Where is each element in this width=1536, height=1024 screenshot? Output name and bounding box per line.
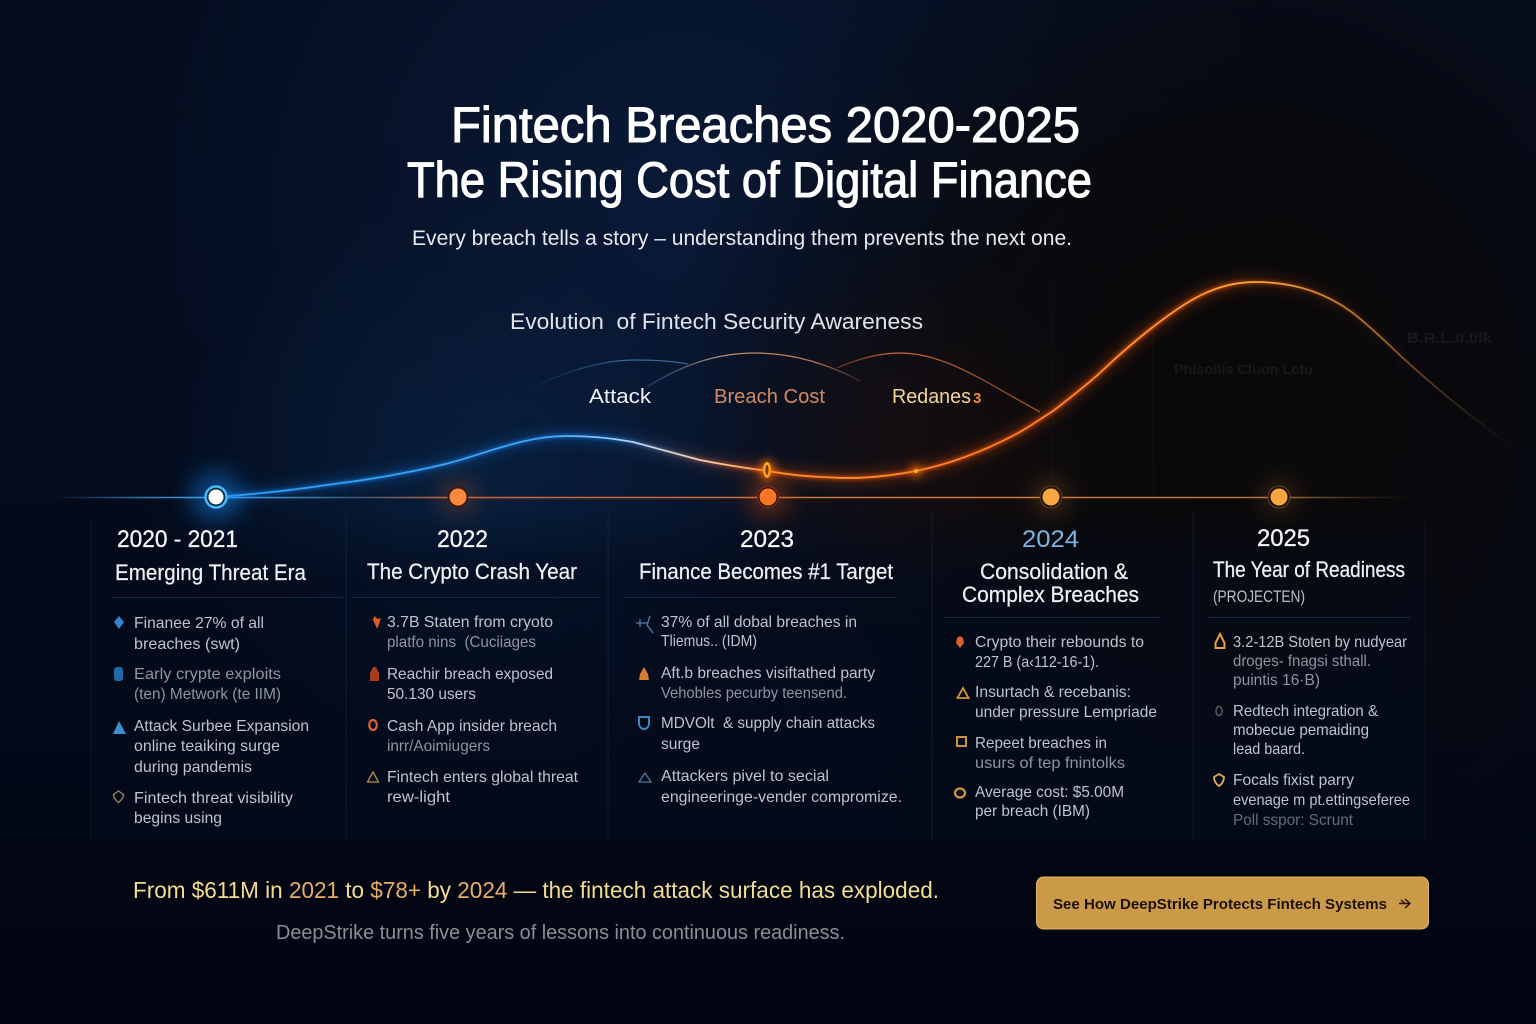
panel: 2022 The Crypto Crash Year: 3.7B Staten from cryoto xyxy=(387,614,553,631)
icon: shield blue xyxy=(639,717,649,729)
panel: 2025 The Year of Readiness: lead baard. xyxy=(1233,741,1305,758)
panel: 2022 The Crypto Crash Year: inrr/Aoimiugers xyxy=(387,738,490,755)
icon: amber flame xyxy=(1216,634,1224,648)
icon: coin xyxy=(955,788,965,798)
panel: 2024 Consolidation and Complex Breaches: 2024 xyxy=(1022,526,1079,553)
panel: 2020-2021 Emerging Threat Era: during pandemis xyxy=(134,759,252,776)
icon: warning amber xyxy=(958,688,968,698)
node: 2025 xyxy=(1264,482,1294,512)
panel: 2020-2021 Emerging Threat Era: online teaiking surge xyxy=(134,738,280,755)
legend labels: 3 xyxy=(973,390,981,407)
call-to-action button: See How DeepStrike Protects Fintech Systems xyxy=(1053,896,1387,913)
panel: 2022 The Crypto Crash Year: Fintech enters global threat xyxy=(387,769,579,786)
subtitle: Every breach tells a story – understanding them prevents the next one. xyxy=(412,227,1072,250)
panel: 2024 Consolidation and Complex Breaches: Consolidation & xyxy=(980,559,1128,584)
panel: 2020-2021 Emerging Threat Era: begins using xyxy=(134,810,222,827)
panel: 2023 Finance Becomes #1 Target: surge xyxy=(661,736,700,753)
faint ghost labels xyxy=(1174,330,1493,377)
panel: 2020-2021 Emerging Threat Era: (ten) Metwork (te IIM) xyxy=(134,686,281,703)
icon: diamond xyxy=(114,616,124,629)
closing statement: From $611M in 2021 to $78+ by 2024 — the fintech attack surface has exploded. xyxy=(133,877,939,903)
icon: database xyxy=(114,667,123,681)
panel: 2024 Consolidation and Complex Breaches: 227 B (a‹112-16-1). xyxy=(975,654,1099,671)
panel: 2020-2021 Emerging Threat Era: 2020 - 2021 xyxy=(117,526,238,553)
panel: 2025 The Year of Readiness: (PROJECTEN) xyxy=(1213,587,1305,606)
icon: network arrow xyxy=(636,616,653,633)
icon: ring xyxy=(369,720,377,730)
faint ghost labels: Phisoilis Cluon Lctu xyxy=(1174,361,1313,377)
panel: 2024 Consolidation and Complex Breaches: Insurtach & recebanis: xyxy=(975,684,1131,701)
panel: 2025 The Year of Readiness: Redtech integration & xyxy=(1233,703,1378,720)
icon: orange drop xyxy=(956,636,964,648)
call-to-action button xyxy=(1036,877,1428,929)
panel: 2022 The Crypto Crash Year: Cash App insider breach xyxy=(387,718,557,735)
icon: grey ring xyxy=(1216,706,1222,716)
panel: 2020-2021 Emerging Threat Era: Finanee 27% of all xyxy=(134,615,264,632)
icon: arrow xyxy=(1399,899,1410,908)
icon: triangle outline xyxy=(639,773,651,782)
panel: 2025 The Year of Readiness: mobecue pemaiding xyxy=(1233,722,1369,739)
panel: 2023 Finance Becomes #1 Target: Aft.b breaches visiftathed party xyxy=(661,665,875,682)
legend labels: Breach Cost xyxy=(714,386,825,408)
panel: 2020-2021 Emerging Threat Era: breaches (swt) xyxy=(134,636,240,653)
panel: 2024 Consolidation and Complex Breaches: Crypto their rebounds to xyxy=(975,634,1144,651)
panel: 2025 The Year of Readiness: evenage m pt.ettingseferee xyxy=(1233,792,1410,809)
panel: 2023 Finance Becomes #1 Target: MDVOlt & supply chain attacks xyxy=(661,715,875,732)
panel: 2025 The Year of Readiness: puintis 16·B) xyxy=(1233,672,1320,689)
panel: 2022 The Crypto Crash Year: rew-light xyxy=(387,789,451,806)
legend labels xyxy=(589,386,981,408)
panel: 2023 Finance Becomes #1 Target: Vehobles pecurby teensend. xyxy=(661,685,847,702)
title: The Rising Cost of Digital Finance xyxy=(407,152,1092,208)
panel: 2025 The Year of Readiness: 2025 xyxy=(1257,525,1310,552)
timeline axis xyxy=(55,496,1410,498)
panel: 2023 Finance Becomes #1 Target: 2023 xyxy=(740,526,794,553)
panel: 2023 Finance Becomes #1 Target: 37% of all dobal breaches in xyxy=(661,614,857,631)
icon: flame xyxy=(372,616,381,629)
chart heading: Evolution of Fintech Security Awareness xyxy=(510,309,923,334)
panel: 2020-2021 Emerging Threat Era xyxy=(91,510,346,845)
title xyxy=(407,97,1092,208)
panel: 2022 The Crypto Crash Year: platfo nins (Cuciiages xyxy=(387,634,536,651)
panel: 2022 The Crypto Crash Year xyxy=(347,510,608,845)
curve sparks xyxy=(761,461,921,479)
icon: square badge xyxy=(957,737,966,746)
panel: 2020-2021 Emerging Threat Era: Fintech threat visibility xyxy=(134,790,293,807)
panel: 2023 Finance Becomes #1 Target xyxy=(609,510,932,845)
panel: 2024 Consolidation and Complex Breaches: per breach (IBM) xyxy=(975,803,1090,820)
panel: 2023 Finance Becomes #1 Target: engineeringe-vender compromize. xyxy=(661,789,902,806)
panel: 2024 Consolidation and Complex Breaches: Repeet breaches in xyxy=(975,735,1107,752)
panel: 2025 The Year of Readiness: The Year of Readiness xyxy=(1213,557,1405,582)
panel: 2024 Consolidation and Complex Breaches: Complex Breaches xyxy=(962,582,1139,607)
faint ghost labels: B.R.L.0.0lk xyxy=(1407,330,1493,347)
panel: 2020-2021 Emerging Threat Era: Emerging Threat Era xyxy=(115,560,307,585)
node: 2023 xyxy=(750,479,786,515)
node: 2022 xyxy=(442,481,474,513)
icon: warning triangle xyxy=(368,772,378,782)
icon: shield outline xyxy=(114,791,124,802)
node: 2020-2021 xyxy=(192,473,240,521)
panel: 2023 Finance Becomes #1 Target: Attackers pivel to secial xyxy=(661,768,829,785)
icon: triangle blue xyxy=(113,721,126,734)
rising curve xyxy=(216,282,1510,497)
panel: 2025 The Year of Readiness xyxy=(1194,510,1425,845)
legend labels: Redanes xyxy=(892,386,971,408)
title: Fintech Breaches 2020-2025 xyxy=(451,97,1080,153)
icon: shield amber xyxy=(1214,774,1224,786)
panel: 2022 The Crypto Crash Year: The Crypto Crash Year xyxy=(367,559,577,584)
panel: 2025 The Year of Readiness: droges- fnagsi sthall. xyxy=(1233,653,1371,670)
panel: 2023 Finance Becomes #1 Target: Tliemus.. (IDM) xyxy=(661,633,757,650)
panel: 2024 Consolidation and Complex Breaches: under pressure Lempriade xyxy=(975,704,1157,721)
panel: 2022 The Crypto Crash Year: Reachir breach exposed xyxy=(387,666,553,683)
node: 2024 xyxy=(1036,482,1066,512)
panel: 2020-2021 Emerging Threat Era: Attack Surbee Expansion xyxy=(134,718,309,735)
panel: 2022 The Crypto Crash Year: 50.130 users xyxy=(387,686,476,703)
panel: 2022 The Crypto Crash Year: 2022 xyxy=(437,526,488,553)
icon: lock xyxy=(370,667,379,681)
panel: 2025 The Year of Readiness: Poll sspor: Scrunt xyxy=(1233,812,1354,829)
panel: 2024 Consolidation and Complex Breaches: Average cost: $5.00M xyxy=(975,784,1124,801)
panel: 2025 The Year of Readiness: 3.2-12B Stoten by nudyear xyxy=(1233,634,1408,651)
panel: 2020-2021 Emerging Threat Era: Early crypte exploits xyxy=(134,666,281,683)
icon: flame orange xyxy=(639,667,649,680)
closing subline: DeepStrike turns five years of lessons into continuous readiness. xyxy=(276,922,845,944)
panel: 2024 Consolidation and Complex Breaches: usurs of tep fnintolks xyxy=(975,755,1125,772)
legend labels: Attack xyxy=(589,386,652,408)
small legend arcs xyxy=(527,353,1040,412)
panel: 2024 Consolidation and Complex Breaches xyxy=(933,510,1193,845)
panel: 2025 The Year of Readiness: Focals fixist parry xyxy=(1233,772,1354,789)
panel: 2023 Finance Becomes #1 Target: Finance Becomes #1 Target xyxy=(639,559,893,584)
